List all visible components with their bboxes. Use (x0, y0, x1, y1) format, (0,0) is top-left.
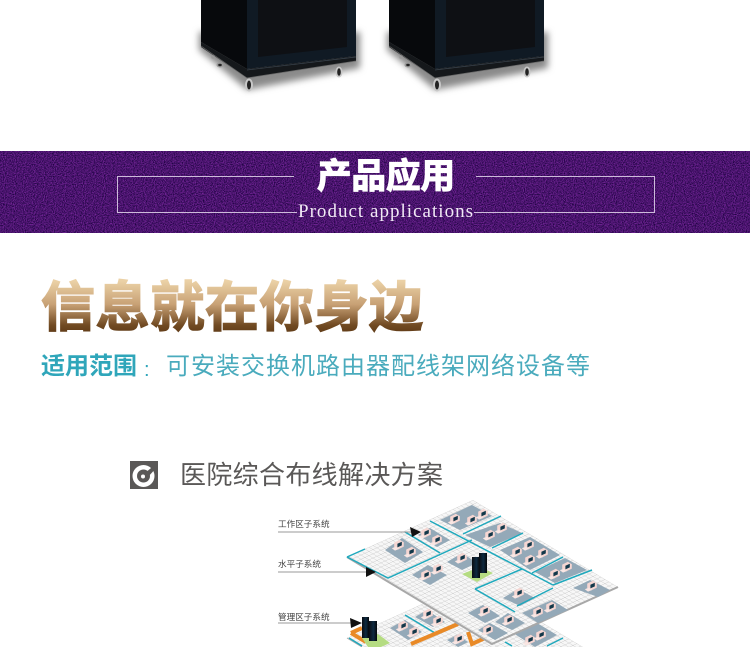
banner background (0, 151, 750, 233)
section heading: hospital cabling (130, 460, 443, 490)
callout: horizontal subsystem: 水平子系统 (278, 558, 321, 569)
banner title: 产品应用 (317, 158, 455, 196)
work area tiles (385, 505, 610, 640)
callout: work area subsystem (278, 518, 421, 537)
icon: target (130, 461, 158, 489)
product photo: two black server cabinets (199, 0, 548, 92)
callout: management subsystem (278, 611, 362, 628)
callout: management subsystem: 管理区子系统 (278, 611, 330, 622)
heading text: 医院综合布线解决方案 (180, 460, 443, 490)
banner frame (118, 176, 654, 212)
computers (392, 509, 597, 636)
server towers (472, 553, 487, 578)
isometric cabling diagram (278, 500, 618, 647)
scope label: 适用范围 (41, 353, 137, 380)
cabinet: left (199, 0, 360, 92)
banner subtitle: Product applications (298, 201, 473, 222)
horizontal cabling lines (347, 516, 592, 612)
lower floor (347, 581, 583, 647)
cabinet: right (387, 0, 548, 92)
upper floor (347, 500, 618, 644)
callout: work area subsystem: 工作区子系统 (278, 518, 330, 529)
scope colon: : (144, 359, 150, 381)
scope description: 可安装交换机路由器配线架网络设备等 (166, 353, 590, 380)
green server pad (462, 567, 493, 582)
scope of application text (41, 353, 590, 381)
callout: horizontal subsystem (278, 558, 376, 577)
banner: product applications (0, 151, 750, 233)
slogan heading: 信息就在你身边 (41, 278, 423, 338)
